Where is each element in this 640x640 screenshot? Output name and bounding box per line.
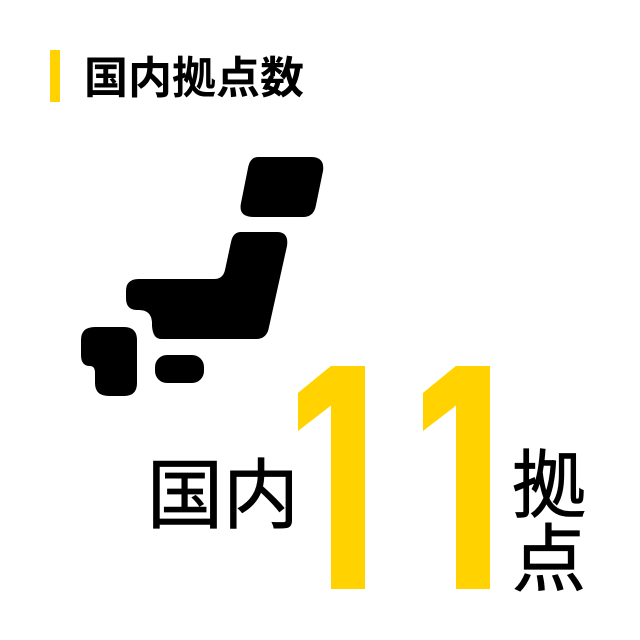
label: locations, vertical: 拠点 [512,426,586,607]
label: domestic: 国内 [147,434,299,544]
heading accent bar [50,50,60,102]
heading: 国内拠点数 [84,42,304,106]
